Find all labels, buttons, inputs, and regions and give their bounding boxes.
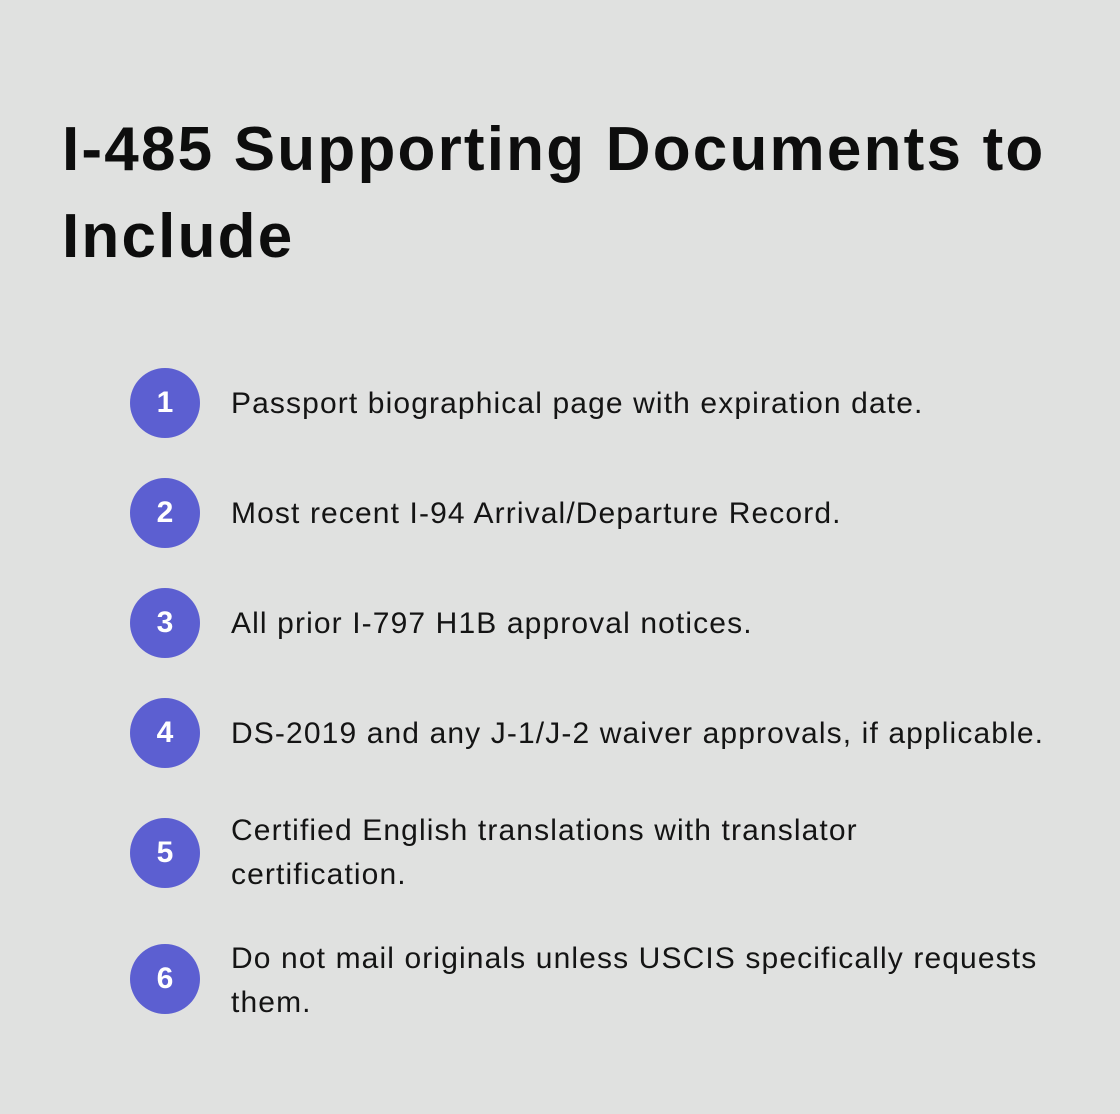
text 2: Most recent I-94 Arrival/Departure Record. [231, 497, 842, 530]
number badge 2: 2 [157, 496, 173, 529]
text 5 [231, 814, 858, 891]
item 6 [130, 942, 1037, 1019]
text 6: Do not mail originals unless USCIS specifically requests [231, 942, 1037, 975]
item 4 [130, 698, 1044, 768]
item 2 [130, 478, 842, 548]
number badge 5: 5 [157, 836, 173, 869]
number badge 5 [130, 818, 200, 888]
number badge 2 [130, 478, 200, 548]
item 1 [130, 368, 924, 438]
text 1: Passport biographical page with expiration date. [231, 387, 924, 420]
number badge 3 [130, 588, 200, 658]
text 6 [231, 942, 1037, 1019]
number badge 6: 6 [157, 962, 173, 995]
title: I-485 Supporting Documents to Include [62, 115, 1046, 271]
number badge 1 [130, 368, 200, 438]
number badge 4: 4 [157, 716, 173, 749]
number badge 3: 3 [157, 606, 173, 639]
number badge 4 [130, 698, 200, 768]
item 3 [130, 588, 753, 658]
text 6: them. [231, 986, 312, 1019]
number badge 6 [130, 944, 200, 1014]
text 5: Certified English translations with translator [231, 814, 858, 847]
text 5: certification. [231, 858, 407, 891]
item 5 [130, 814, 858, 891]
number badge 1: 1 [157, 386, 173, 419]
text 4: DS-2019 and any J-1/J-2 waiver approvals, if applicable. [231, 717, 1044, 750]
text 3: All prior I-797 H1B approval notices. [231, 607, 753, 640]
